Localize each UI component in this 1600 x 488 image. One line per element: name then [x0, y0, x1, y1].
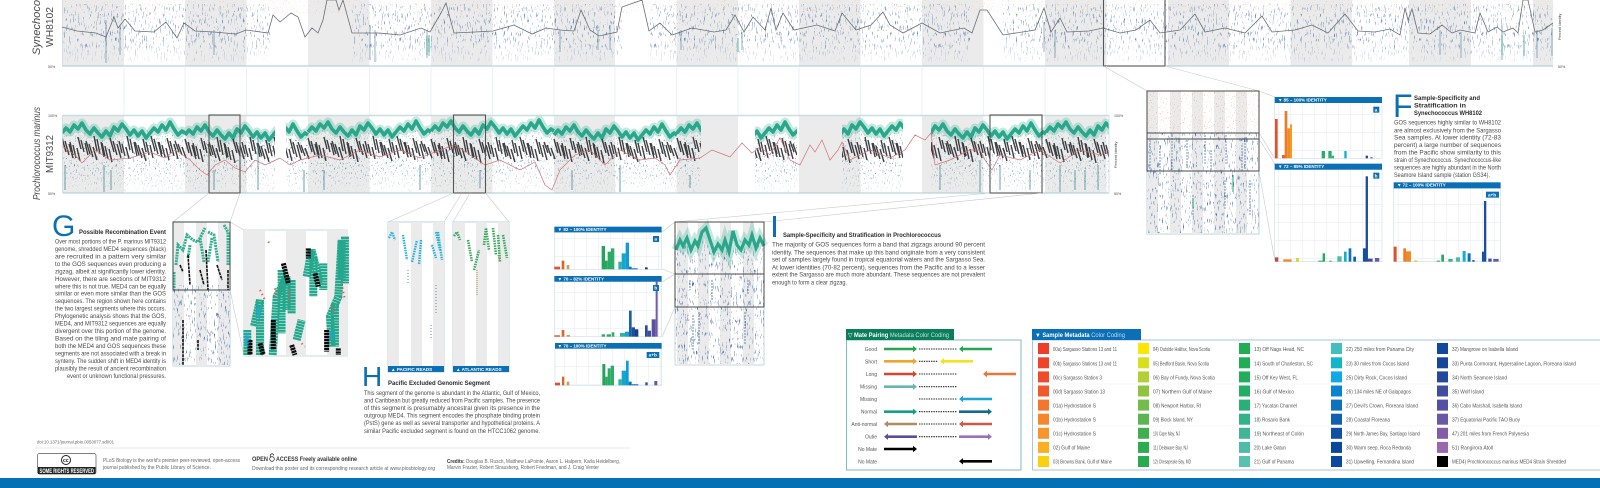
legend: mate pairing: Normal: [861, 410, 877, 416]
text: panel F heading and description: Sea samples. At lower identity (72-83: [1394, 135, 1502, 142]
label: Synechococcus WH8102: WH8102: [44, 7, 56, 47]
panel H: Atlantic reads: [453, 222, 509, 372]
text: panel H description: and Caribbean but greatly reduced from Pacific samples. The presence: [364, 398, 540, 405]
swatches: column 3: 13) Off Nags Head, NC: [1254, 347, 1304, 353]
swatches: column 1: 01b) Hydrostation S: [1053, 418, 1096, 424]
chart I-b: 70-82% identity: b: [654, 286, 657, 291]
text: open access notice: ACCESS Freely available online: [276, 457, 358, 463]
text: credits: Credits: Douglas B. Rusch, Matthew LaPointe, Aaron L. Halpern, Karla Heidelberg,: [447, 459, 620, 465]
panel H: Pacific reads: ▲ PACIFIC READS: [391, 367, 432, 372]
text: panel F heading and description: F: [1393, 88, 1413, 124]
axis labels: bottom plot: [48, 114, 1124, 196]
text: panel F heading and description: percent) a large number of sequences: [1394, 142, 1501, 149]
text: panel F heading and description: from the Pacific show similarity to this: [1394, 150, 1501, 157]
text: panel G description: [52, 210, 167, 380]
swatches: column 4: 25) Dirty Rock, Cocos Island: [1346, 375, 1407, 381]
text: panel H description: This segment of the genome is abundant in the Atlantic, Gulf of Mexico,: [364, 390, 540, 397]
chart F-c: 72-100% identity: a+b: [1488, 192, 1496, 197]
chart F-a: 85-100% identity: a: [1375, 107, 1378, 112]
text: panel G description: similar or even more similar than the GOS: [55, 291, 166, 298]
swatches: column 3: 17) Yucatan Channel: [1254, 404, 1297, 410]
legend: mate pairing: [846, 329, 1021, 470]
box: upper frame: [173, 222, 230, 290]
chart F-b: 72-85% identity: [1275, 164, 1382, 262]
text: panel H description: outgroup MED4. This segment encodes the phosphate binding protein: [364, 413, 541, 420]
swatches: column 2: 05) Bedford Basin, Nova Scotia: [1153, 361, 1209, 367]
text: panel G description: G: [52, 210, 75, 243]
text: panel H description: H: [362, 361, 382, 392]
swatches: column 5: 36) Cabo Marshall, Isabella Island: [1452, 404, 1522, 410]
legend: sample metadata: ▼ Sample Metadata Color Coding: [1035, 333, 1125, 339]
swatches: column 4: 28) Coastal Floreana: [1346, 418, 1390, 424]
swatches: column 5: [1437, 343, 1576, 467]
text: credits: Marvin Frazier, Robert Strausberg, Robert Friedman, and J. Craig Venter: [447, 465, 599, 471]
band: GOS sequences zigzag: [62, 120, 1169, 140]
text: panel I description: extent the Sargasso are much more abundant. These sequences are not prevalent: [772, 272, 985, 279]
swatches: column 2: 04) Outside Halifax, Nova Scotia: [1153, 347, 1210, 353]
axis labels: bottom plot: 50%: [48, 192, 56, 196]
chart F-a: 85-100% identity: [1275, 97, 1382, 158]
text: panel G description: event or unknown functional pressures.: [67, 373, 166, 380]
axis labels: top plot: 50%: [1558, 65, 1566, 69]
text: open access notice: [252, 454, 435, 472]
label: Synechococcus WH8102: [31, 0, 56, 55]
line: MED4 reference trace: [62, 133, 1109, 190]
text: open access notice: OPEN: [252, 457, 268, 463]
icon: open access lock: [270, 454, 274, 461]
swatches: column 1: [1038, 343, 1117, 467]
text: panel G description: Possible Recombination Event: [79, 230, 166, 236]
chart I-a: 82-100% identity: [554, 227, 662, 269]
legend: mate pairing: Anti-normal: [851, 422, 877, 428]
box: zoomed region marker: [1104, 0, 1165, 66]
panel F: scatter zoom: [1147, 91, 1259, 234]
chart F-c: 72-100% identity: ▼ 72 – 100% IDENTITY: [1397, 183, 1446, 188]
legend: mate pairing: No Mate: [858, 447, 877, 453]
swatches: column 5: 37) Equatorial Pacific TAO Buoy: [1452, 418, 1520, 424]
swatches: column 3: 19) Northeast of Colón: [1254, 432, 1304, 438]
chart I-c: 70-100% identity: ▼ 70 – 100% IDENTITY: [558, 343, 606, 348]
text: panel I description: The majority of GOS sequences form a band that zigzags around 90 percent: [772, 242, 985, 249]
text: PLoS Biology statement: PLoS Biology is the world's premier peer-reviewed, open-access: [103, 458, 240, 464]
text: panel G description: are recruited in a pattern very similar: [55, 253, 166, 260]
icon: Creative Commons badge: [38, 454, 96, 475]
chart F-a: 85-100% identity: ▼ 85 – 100% IDENTITY: [1278, 97, 1327, 102]
text: panel G description: sequences. The region shown here contains: [55, 298, 166, 305]
chart I-b: 70-82% identity: ▼ 70 – 82% IDENTITY: [558, 276, 604, 281]
swatches: column 1: 00c) Sargasso Station 3: [1053, 375, 1102, 381]
legend: mate pairing: ▽ Mate Pairing Metadata Color Coding: [848, 333, 949, 339]
text: panel G description: Based on the tiling and mate pairing of: [55, 336, 166, 342]
swatches: column 2: 07) Northern Gulf of Maine: [1153, 390, 1212, 396]
text: panel G description: MED4, and MIT9312 sequences are equally: [55, 321, 167, 328]
legend: mate pairing: No Mate: [858, 459, 877, 465]
swatches: column 4: 22) 250 miles from Panama City: [1346, 347, 1414, 353]
swatches: column 4: [1331, 343, 1420, 467]
swatches: column 3: 16) Gulf of Mexico: [1254, 390, 1294, 396]
text: panel G description: genome, shredded MED4 sequences (black): [55, 246, 166, 253]
swatches: column 4: 27) Devil's Crown, Floreana Island: [1346, 404, 1418, 410]
text: panel I description: identity. The sequences that make up this band originate from a very consistent: [772, 249, 985, 256]
text: panel H description: (PstS) gene as well as several transporter and hypothetical proteins. A: [364, 420, 541, 427]
swatches: column 4: 30) Warm seep, Roca Redonda: [1346, 446, 1411, 452]
boxes: zoomed region markers: [209, 115, 1042, 193]
swatches: column 5: MED4) Prochlorococcus marinus MED4 Strain Shredded: [1452, 460, 1566, 466]
swatches: column 5: 35) Wolf Island: [1452, 390, 1484, 396]
text: panel I description: set of samples largely found in tropical equatorial waters and the Sargasso Sea.: [772, 257, 985, 264]
chart I-c: 70-100% identity: [555, 343, 662, 385]
text: panel H description: [362, 361, 541, 435]
text: panel F heading and description: Synechococcus WH8102: [1414, 111, 1483, 117]
text: panel F heading and description: strain of Synechococcus. Synechococcus-like: [1394, 157, 1501, 164]
chart: Synechococcus WH8102 recruitment plot: [62, 0, 1553, 66]
swatches: column 5: 33) Punta Cormorant, Hypersaline Lagoon, Floreana Island: [1452, 361, 1576, 367]
axis labels: top plot: Percent Identity: [1558, 14, 1562, 40]
text: panel G description: Phylogenetic analysis shows that the GOS,: [55, 313, 166, 320]
text: panel F heading and description: GOS sequences highly similar to WH8102: [1394, 120, 1502, 127]
label: Prochlorococcus marinus MIT9312: Prochlorococcus marinus: [31, 106, 43, 200]
text: panel G description: both the MED4 and GOS sequences these: [55, 343, 167, 350]
axis labels: top plot: [48, 14, 1566, 69]
text: panel G description: Over most portions of the P. marinus MIT9312: [55, 238, 166, 246]
axis labels: bottom plot: 50%: [1114, 192, 1122, 196]
swatches: column 2: 06) Bay of Fundy, Nova Scotia: [1153, 375, 1215, 381]
band: MED4 black sequences: [62, 136, 1170, 163]
text: panel I description: [772, 216, 985, 286]
panel I: scatter zoom: [675, 222, 764, 365]
swatches: column 2: 10) Cape May, NJ: [1153, 432, 1180, 438]
swatches: column 1: 00d) Sargasso Station 13: [1053, 390, 1105, 396]
text: panel F heading and description: are almost exclusively from the Sargasso: [1394, 127, 1502, 134]
icon: Creative Commons badge: SOME RIGHTS RESERVED: [40, 469, 94, 475]
footer bar: [0, 478, 1600, 488]
text: panel F heading and description: Sample-Specificity and: [1414, 96, 1480, 102]
legend: mate pairing: Missing: [860, 385, 877, 391]
text: PLoS Biology statement: journal published by the Public Library of Science.: [102, 465, 211, 471]
text: open access notice: Download this poster and its corresponding research article at www.plosbiology.org: [252, 466, 435, 472]
chart I-a: 82-100% identity: ▼ 82 – 100% IDENTITY: [558, 227, 606, 232]
line: mean identity trace: [62, 0, 1553, 38]
swatches: column 4: 31) Upwelling, Fernandina Island: [1346, 460, 1414, 466]
text: panel G description: segments are not associated with a break in: [55, 350, 167, 357]
text: credits: [447, 459, 620, 471]
legend: mate pairing: Missing: [860, 397, 877, 403]
text: panel F heading and description: Seamore Island sample (station GS34).: [1394, 172, 1490, 179]
axis labels: top plot: 50%: [48, 65, 56, 69]
text: panel H description: Pacific Excluded Genomic Segment: [388, 381, 490, 387]
swatches: column 2: 09) Block Island, NY: [1153, 418, 1193, 424]
swatches: column 3: 18) Rosario Bank: [1254, 418, 1290, 424]
swatches: column 2: 08) Newport Harbor, RI: [1153, 404, 1201, 410]
swatches: column 1: 01c) Hydrostation S: [1053, 432, 1096, 438]
label: Prochlorococcus marinus MIT9312: [31, 106, 56, 200]
chart I-b: 70-82% identity: [554, 276, 662, 337]
swatches: column 1: 00a) Sargasso Stations 13 and 11: [1053, 347, 1117, 353]
swatches: column 4: 26) 134 miles NE of Galapagos: [1346, 390, 1411, 396]
text: panel I description: enough to form a clear zigzag.: [772, 279, 847, 286]
text: panel G description: where this is not true. MED4 can be equally: [54, 283, 167, 290]
swatches: column 2: 11) Delaware Bay, NJ: [1153, 446, 1188, 452]
text: panel G description: However, there are sections of MIT9312: [55, 276, 167, 283]
swatches: column 5: 34) North Seamore Island: [1452, 375, 1507, 381]
swatches: column 3: 15) Off Key West, FL: [1254, 375, 1298, 381]
swatches: column 1: 01a) Hydrostation S: [1053, 404, 1096, 410]
text: panel G description: the two largest segments where this occurs.: [55, 306, 166, 313]
swatches: column 4: 29) North James Bay, Santiago Island: [1346, 432, 1420, 438]
text: panel F heading and description: sequences are highly abundant in the North: [1394, 165, 1501, 172]
chart F-b: 72-85% identity: b: [1375, 173, 1378, 178]
chart I-c: 70-100% identity: a+b: [649, 353, 657, 358]
legend: mate pairing: Short: [865, 359, 878, 365]
panel H: Atlantic reads: ▲ ATLANTIC READS: [456, 367, 502, 372]
text: panel H description: similar Pacific excluded segment is found on the HTCC1062 genome.: [364, 428, 540, 435]
text: panel I description: Sample-Specificity and Stratification in Prochlorococcus: [783, 233, 942, 239]
swatches: column 5: 32) Mangrove on Isabella Island: [1452, 347, 1518, 353]
text: panel G description: synteny. The sudden shift in MED4 identity is: [55, 358, 166, 365]
swatches: column 3: 21) Gulf of Panama: [1254, 460, 1294, 466]
swatches: column 1: 00b) Sargasso Stations 13 and 11: [1053, 361, 1117, 367]
swatches: column 5: 47) 201 miles from French Polynesia: [1452, 432, 1529, 438]
box: stratification frames: [1147, 91, 1259, 171]
chart F-b: 72-85% identity: ▼ 72 – 85% IDENTITY: [1278, 164, 1324, 169]
swatches: column 3: [1239, 343, 1313, 467]
text: panel G description: zigzag, albeit at significantly lower identity.: [55, 268, 166, 275]
text: doi: doi:10.1371/journal.pbio.0050077.sd001: [37, 440, 114, 444]
panel G: scatter zoom wide: [244, 230, 347, 356]
label: Prochlorococcus marinus MIT9312: MIT9312: [45, 135, 56, 173]
panel G: scatter zoom narrow: [173, 222, 230, 366]
axis labels: bottom plot: 100%: [48, 114, 58, 118]
text: panel I description: At lower identities (70-82 percent), sequences from the Pacific and to a lesser: [772, 264, 985, 271]
swatches: column 1: 03) Browns Bank, Gulf of Maine: [1053, 460, 1112, 466]
swatches: column 3: 20) Lake Gatun: [1254, 446, 1286, 452]
swatches: column 3: 14) South of Charleston, SC: [1254, 361, 1313, 367]
swatches: column 4: 23) 30 miles from Cocos Island: [1346, 361, 1409, 367]
chart: Prochlorococcus MIT9312 recruitment plot: [62, 115, 1170, 193]
icon: Creative Commons badge: cc: [63, 458, 69, 464]
legend: mate pairing: Outie: [865, 435, 877, 441]
panel H: Pacific reads: [388, 222, 444, 372]
swatches: column 2: 12) Chesapeake Bay, MD: [1153, 460, 1191, 466]
text: panel F heading and description: [1393, 88, 1502, 179]
chart I-a: 82-100% identity: a: [654, 237, 657, 242]
text: panel F heading and description: Stratification in: [1414, 104, 1466, 110]
text: panel H description: of this segment is presumably ancestral given its presence in the: [364, 405, 541, 412]
axis labels: bottom plot: Percent Identity: [1114, 142, 1118, 168]
legend: sample metadata: [1032, 329, 1600, 470]
text: panel G description: divergent over this portion of the genome.: [55, 328, 166, 335]
swatches: column 2: [1138, 343, 1215, 467]
axis labels: bottom plot: 100%: [1114, 114, 1124, 118]
swatches: column 5: 51) Rangirora Atoll: [1452, 446, 1493, 452]
swatches: column 1: 02) Gulf of Maine: [1053, 446, 1090, 452]
box: stratification frames: [675, 222, 764, 307]
text: panel G description: to the GOS sequences even producing a: [55, 261, 167, 268]
text: panel G description: plausibly the result of ancient recombination: [55, 365, 167, 372]
legend: mate pairing: Good: [865, 347, 877, 353]
legend: mate pairing: Long: [866, 372, 877, 378]
text: PLoS Biology statement: [102, 458, 240, 471]
chart F-c: 72-100% identity: [1394, 182, 1501, 262]
